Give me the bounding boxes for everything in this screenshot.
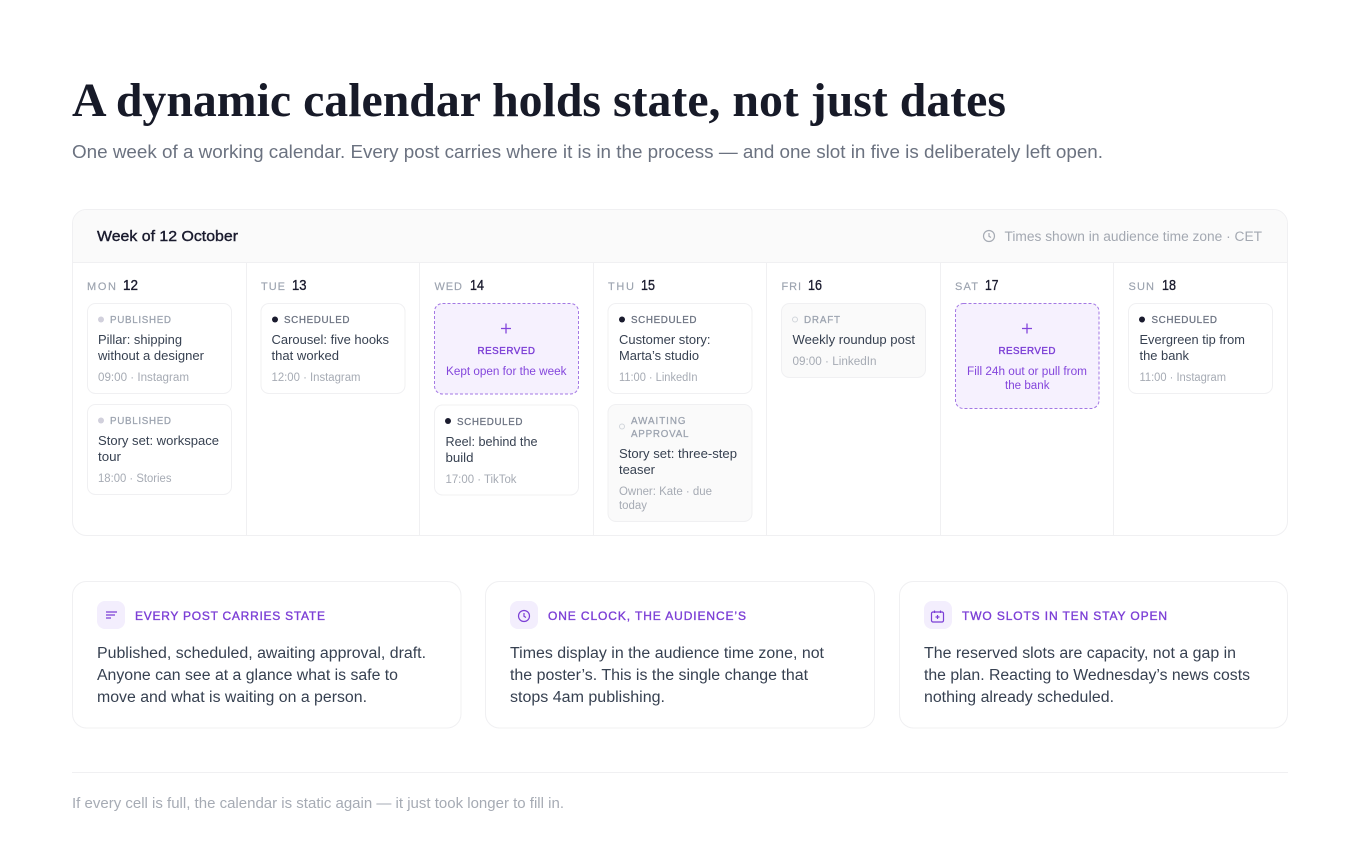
column: Friday — [782, 278, 926, 378]
card: scheduled reel — [434, 405, 578, 495]
day header: Saturday: 17 — [985, 278, 998, 294]
card: reserved slot — [434, 304, 578, 394]
card: awaiting approval: teaser — [619, 462, 656, 477]
day header: Friday — [782, 278, 822, 294]
day header: Tuesday: TUE — [261, 281, 285, 293]
body text: the poster’s. This is the single change that — [510, 667, 809, 684]
body text — [924, 645, 1250, 706]
card: published pillar: 09:00 · Instagram — [98, 372, 189, 384]
footer note: If every cell is full, the calendar is static again — it just took longer to fill in. — [72, 796, 564, 812]
card: reserved slot: Kept open for the week — [446, 366, 567, 378]
column: Tuesday — [261, 278, 405, 394]
panel: weekly calendar — [72, 210, 1288, 536]
card: reserved slot: the bank — [1005, 380, 1050, 392]
card: scheduled evergreen tip — [1128, 304, 1272, 394]
day header: Thursday: THU — [608, 281, 634, 293]
card: draft: DRAFT — [804, 315, 840, 326]
day header: Wednesday: 14 — [470, 278, 484, 294]
card: scheduled carousel — [261, 304, 405, 394]
card: awaiting approval: Story set: three-step — [619, 446, 737, 461]
day header: Monday: MON — [87, 281, 116, 293]
card: awaiting approval — [608, 404, 752, 522]
card: scheduled reel: Reel: behind the — [446, 434, 538, 449]
column: Saturday — [955, 278, 1099, 408]
body text: Times display in the audience time zone, not — [510, 645, 825, 662]
card: published pillar — [88, 304, 232, 394]
body text — [97, 645, 426, 706]
card: scheduled carousel: SCHEDULED — [284, 315, 350, 326]
icon: calendar plus — [924, 601, 952, 629]
card: published story set: PUBLISHED — [110, 416, 171, 427]
day header: Tuesday — [261, 278, 306, 294]
column: Sunday — [1128, 278, 1272, 394]
card: scheduled customer story: SCHEDULED — [631, 315, 696, 326]
card: reserved slot: Fill 24h out or pull from — [967, 366, 1087, 378]
icon: clock — [510, 601, 538, 629]
icon: status lines — [97, 601, 125, 629]
card: scheduled evergreen tip: SCHEDULED — [1152, 315, 1217, 326]
card: reserved slot: RESERVED — [998, 346, 1056, 357]
card: scheduled customer story: Customer story: — [619, 332, 710, 347]
day header: Wednesday — [434, 278, 484, 294]
time zone note: Times shown in audience time zone · CET — [1004, 229, 1262, 244]
card: scheduled evergreen tip: Evergreen tip from — [1140, 332, 1245, 347]
column: Wednesday — [434, 278, 578, 495]
heading: TWO SLOTS IN TEN STAY OPEN — [962, 609, 1167, 623]
title: A dynamic calendar holds state, not just dates — [72, 74, 1006, 127]
body text — [510, 645, 825, 706]
day header: Wednesday: WED — [434, 281, 462, 293]
panel: one clock — [486, 582, 874, 728]
card: published story set: tour — [98, 449, 122, 464]
heading: ONE CLOCK, THE AUDIENCE’S — [548, 609, 746, 623]
card: draft: Weekly roundup post — [792, 332, 915, 347]
calendar heading: Week of 12 October — [97, 228, 238, 245]
card: scheduled reel: build — [446, 450, 474, 465]
card: published pillar: Pillar: shipping — [98, 332, 182, 347]
panel: two slots in ten stay open — [900, 582, 1288, 728]
day header: Friday: FRI — [782, 281, 801, 293]
heading: EVERY POST CARRIES STATE — [135, 609, 325, 623]
column: Thursday — [608, 278, 752, 522]
day header: Monday — [87, 278, 138, 294]
panel: every post carries state — [72, 582, 461, 728]
card: scheduled evergreen tip: the bank — [1140, 348, 1189, 363]
card: reserved slot — [956, 304, 1099, 408]
day header: Sunday: 18 — [1162, 278, 1176, 294]
card: scheduled carousel: 12:00 · Instagram — [272, 372, 360, 384]
card: scheduled customer story: 11:00 · LinkedIn — [619, 372, 698, 384]
day header: Saturday: SAT — [955, 281, 978, 293]
card: draft — [782, 304, 926, 378]
card: published story set: 18:00 · Stories — [98, 473, 172, 485]
card: awaiting approval: today — [619, 500, 647, 512]
day header: Friday: 16 — [808, 278, 822, 294]
body text: Anyone can see at a glance what is safe to — [97, 667, 398, 684]
day header: Monday: 12 — [123, 278, 138, 294]
card: published pillar: PUBLISHED — [110, 315, 171, 326]
card: scheduled carousel: that worked — [272, 348, 339, 363]
body text: The reserved slots are capacity, not a gap in — [924, 645, 1236, 662]
subtitle: One week of a working calendar. Every post carries where it is in the process — and one slot in five is deliberately left open. — [72, 141, 1103, 162]
day header: Sunday: SUN — [1128, 281, 1154, 293]
card: reserved slot: RESERVED — [478, 346, 535, 357]
body text: nothing already scheduled. — [924, 689, 1114, 706]
icon: clock — [984, 230, 994, 242]
day header: Thursday: 15 — [641, 278, 655, 294]
card: published story set: Story set: workspace — [98, 433, 219, 448]
card: published story set — [88, 404, 232, 494]
card: awaiting approval: Owner: Kate · due — [619, 486, 712, 498]
card: published pillar: without a designer — [97, 348, 205, 363]
card: awaiting approval: APPROVAL — [631, 429, 689, 440]
card: scheduled reel: 17:00 · TikTok — [446, 474, 517, 486]
body text: move and what is waiting on a person. — [97, 689, 367, 706]
card: scheduled reel: SCHEDULED — [457, 417, 522, 428]
card: scheduled customer story — [608, 304, 752, 394]
card: awaiting approval: AWAITING — [631, 416, 686, 427]
body text: Published, scheduled, awaiting approval, draft. — [97, 645, 426, 662]
column: Monday — [87, 278, 232, 494]
card: draft: 09:00 · LinkedIn — [792, 356, 876, 368]
body text: stops 4am publishing. — [510, 689, 665, 706]
body text: the plan. Reacting to Wednesday’s news costs — [924, 667, 1250, 684]
day header: Tuesday: 13 — [292, 278, 306, 294]
card: scheduled customer story: Marta’s studio — [619, 348, 699, 363]
day header: Thursday — [608, 278, 655, 294]
card: scheduled evergreen tip: 11:00 · Instagram — [1140, 372, 1226, 384]
card: scheduled carousel: Carousel: five hooks — [272, 332, 389, 347]
day header: Sunday — [1128, 278, 1176, 294]
day header: Saturday — [955, 278, 998, 294]
